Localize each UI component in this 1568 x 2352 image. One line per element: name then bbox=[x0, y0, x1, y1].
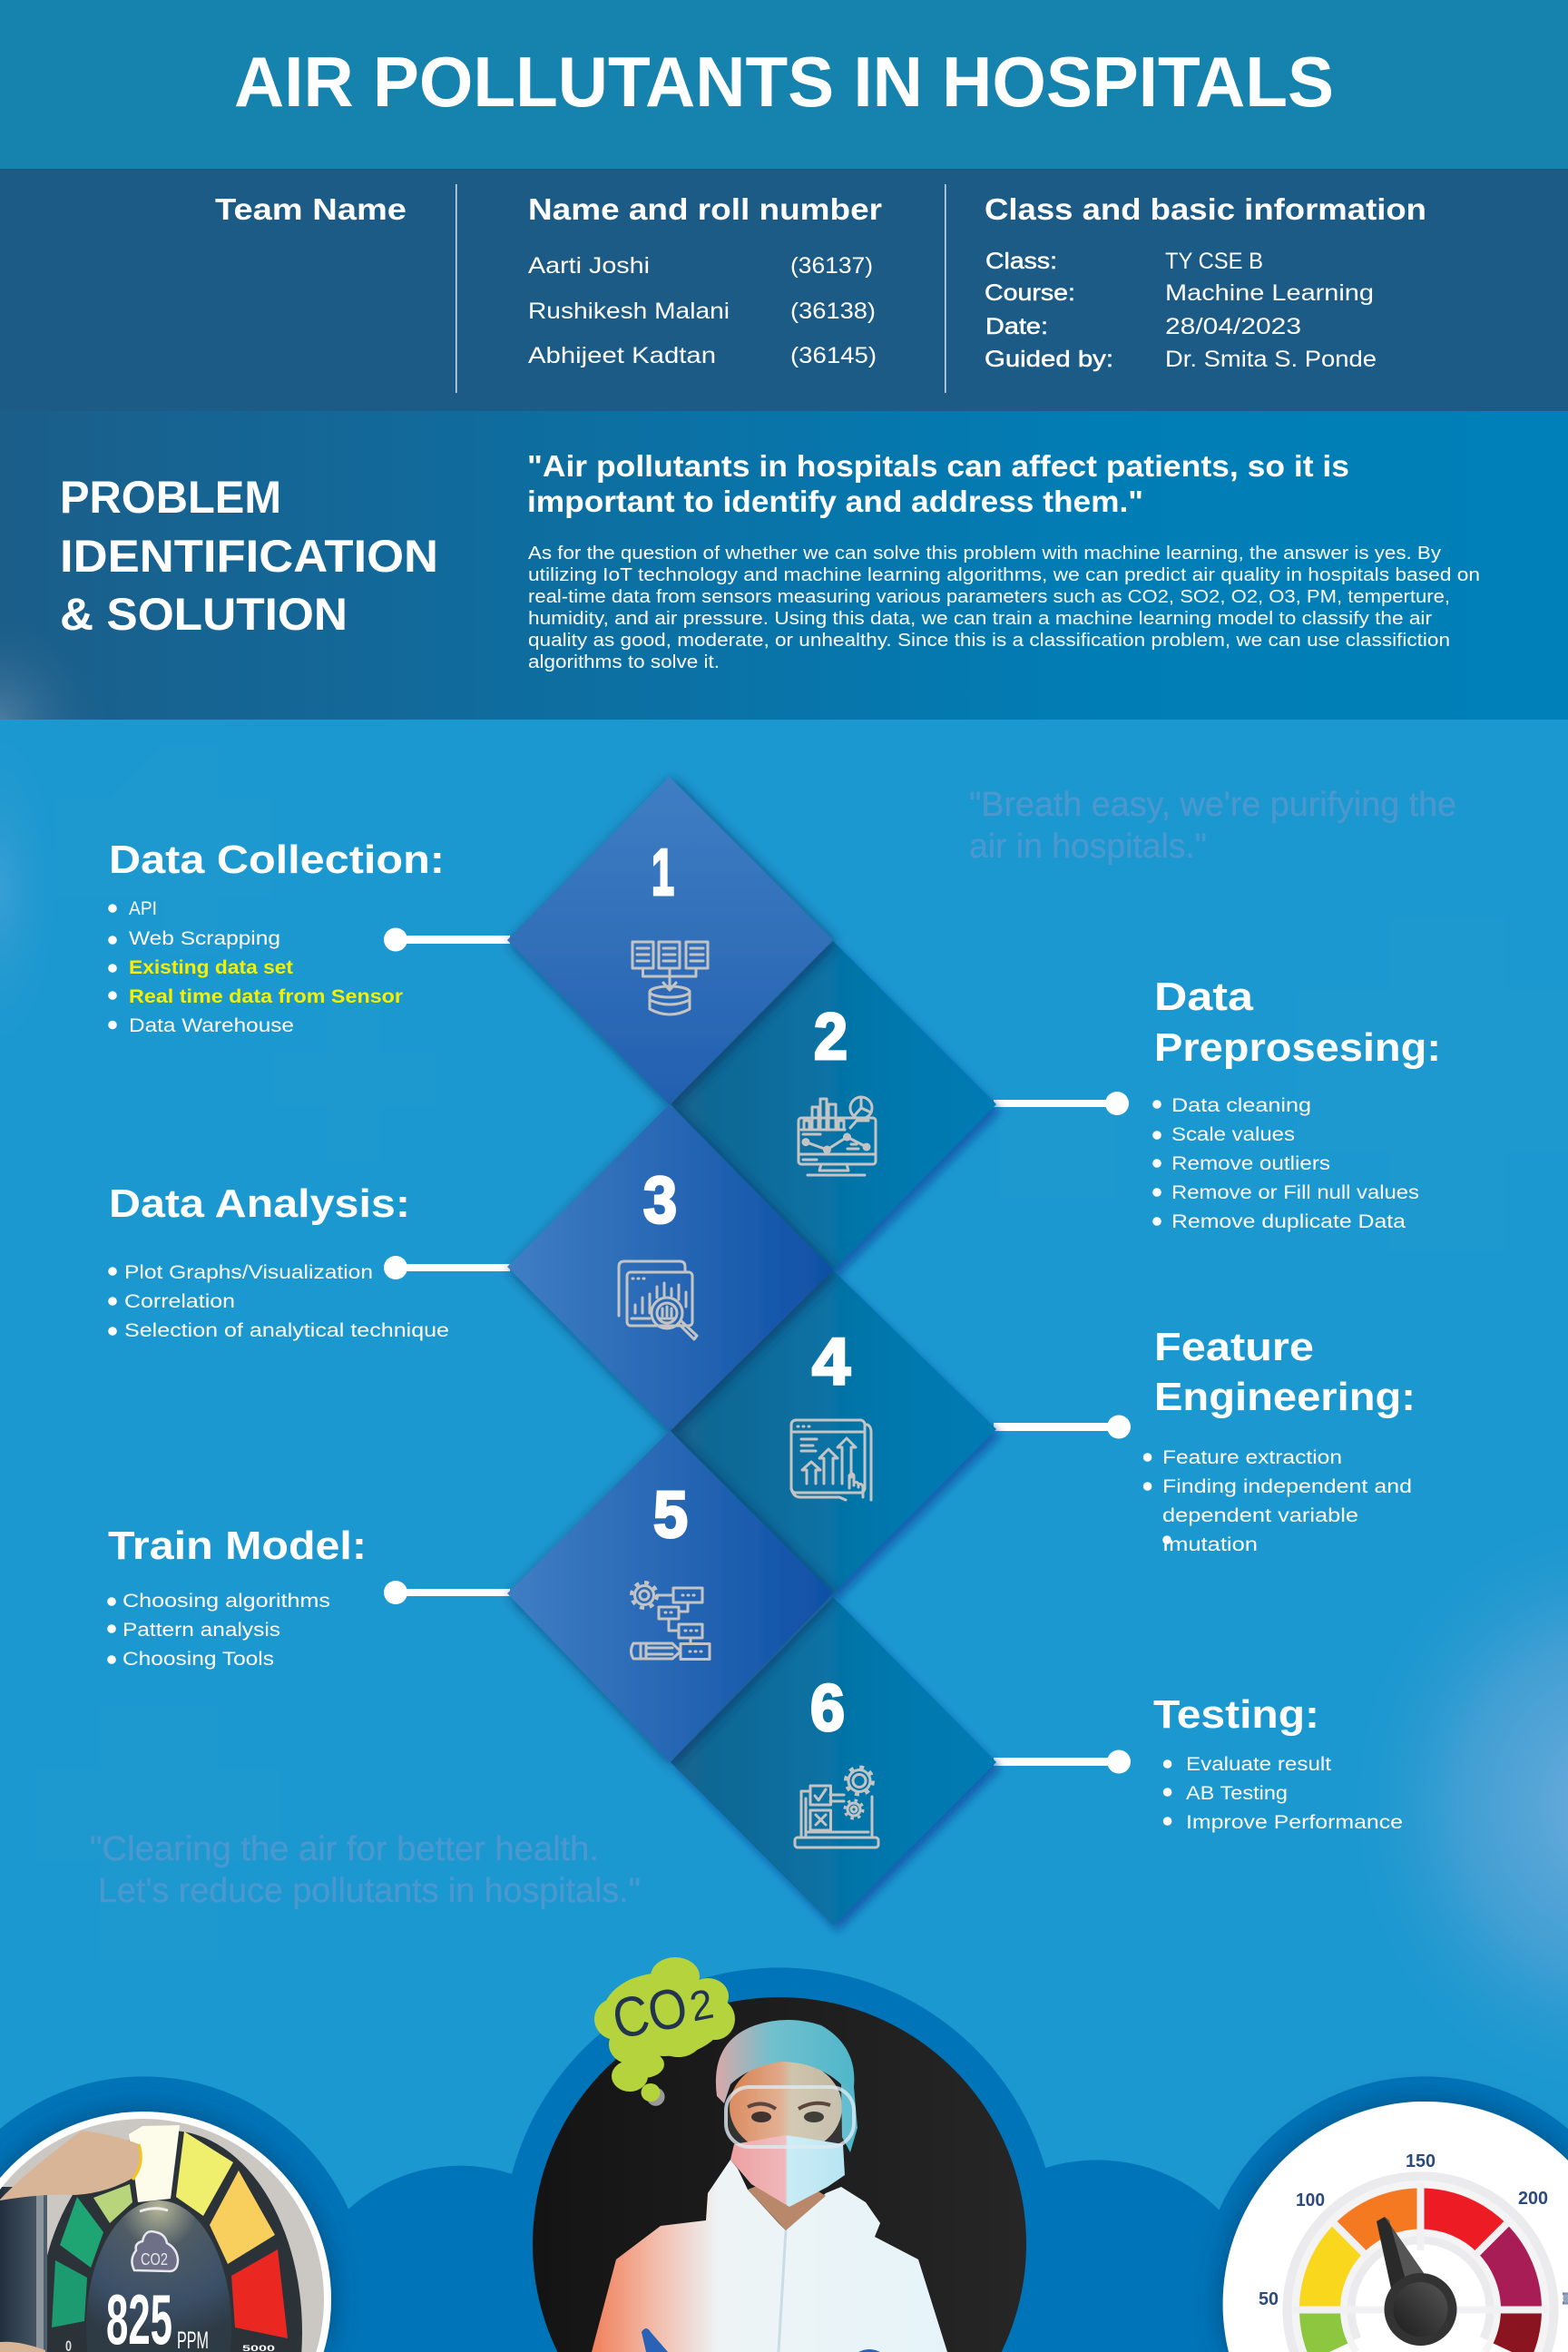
text block: feature engineering bbox=[1143, 1325, 1416, 1555]
text block: train model: Choosing algorithms bbox=[122, 1591, 330, 1612]
CO2 label: 2 bbox=[686, 1980, 717, 2030]
gauge numbers: 200 bbox=[1518, 2189, 1548, 2209]
background cross pattern bbox=[36, 744, 1568, 1960]
names and roll numbers: Aarti Joshi bbox=[528, 253, 650, 279]
text block: feature engineering: Feature bbox=[1154, 1325, 1314, 1369]
gauge numbers: 50 bbox=[1259, 2289, 1279, 2309]
solution paragraph bbox=[528, 544, 1480, 672]
quote bbox=[527, 449, 1349, 518]
names and roll numbers: (36145) bbox=[790, 343, 877, 368]
quote: important to identify and address them." bbox=[527, 485, 1143, 518]
faint quote bottom left: Let's reduce pollutants in hospitals." bbox=[98, 1872, 641, 1910]
suit zipper bbox=[779, 2230, 786, 2352]
text block: testing bbox=[1153, 1692, 1403, 1833]
problem heading: & SOLUTION bbox=[60, 589, 348, 640]
icon: CO2 cloud: CO2 bbox=[141, 2250, 168, 2269]
hair net bbox=[716, 2020, 858, 2152]
class and basic information: TY CSE B bbox=[1165, 249, 1263, 274]
problem heading bbox=[60, 472, 438, 640]
text block: data preprocessing bbox=[1152, 975, 1441, 1232]
icon: analytics monitor bbox=[799, 1097, 876, 1175]
step 6 diamond bbox=[671, 1597, 996, 1926]
gauge segments bbox=[1319, 2209, 1521, 2352]
title: AIR POLLUTANTS IN HOSPITALS bbox=[234, 42, 1334, 122]
faint quote top right: air in hospitals." bbox=[969, 828, 1207, 866]
problem heading: IDENTIFICATION bbox=[60, 531, 438, 582]
text block: data collection: Existing data set bbox=[129, 957, 293, 978]
class and basic information: Course: bbox=[985, 280, 1075, 306]
text block: feature engineering: dependent variable bbox=[1162, 1505, 1358, 1526]
text block: data analysis: Selection of analytical technique bbox=[124, 1320, 449, 1341]
text block: data analysis bbox=[108, 1181, 449, 1341]
panel: team information bbox=[0, 169, 1568, 411]
icon: magnifier over chart bbox=[619, 1261, 697, 1339]
text block: data collection: Web Scrapping bbox=[129, 928, 280, 949]
text block: data preprocessing: Remove or Fill null values bbox=[1171, 1182, 1419, 1203]
solution paragraph: utilizing IoT technology and machine learning algorithms, we can predict air quality in hospitals based on bbox=[528, 565, 1480, 585]
surgical mask bbox=[730, 2135, 845, 2207]
text block: testing: Improve Performance bbox=[1186, 1812, 1403, 1833]
team name heading: Team Name bbox=[215, 192, 407, 226]
eyes and brows bbox=[748, 2103, 830, 2122]
text block: data collection: Data Collection: bbox=[109, 838, 445, 882]
blue gloves bbox=[642, 2328, 880, 2352]
solution paragraph: quality as good, moderate, or unhealthy. Since this is a classification problem, we can use classifiction bbox=[528, 631, 1450, 651]
text block: train model: Choosing Tools bbox=[122, 1649, 274, 1670]
text block: data preprocessing: Remove duplicate Data bbox=[1171, 1211, 1406, 1232]
goggles bbox=[726, 2087, 854, 2147]
background glow left bbox=[0, 720, 64, 1062]
solution paragraph: real-time data from sensors measuring various parameters such as CO2, SO2, O2, O3, PM, temperture, bbox=[528, 587, 1450, 607]
names and roll numbers: Name and roll number bbox=[528, 192, 882, 226]
text block: train model bbox=[107, 1524, 367, 1670]
text block: data preprocessing: Scale values bbox=[1171, 1124, 1295, 1145]
quote: "Air pollutants in hospitals can affect patients, so it is bbox=[527, 449, 1349, 483]
person photo circle bbox=[533, 1997, 1026, 2352]
solution paragraph: As for the question of whether we can solve this problem with machine learning, the answer is yes. By bbox=[528, 544, 1441, 564]
step number 6: 6 bbox=[810, 1672, 845, 1745]
step number 4: 4 bbox=[812, 1326, 850, 1398]
text block: feature engineering: Imutation bbox=[1162, 1534, 1258, 1555]
text block: train model: Pattern analysis bbox=[122, 1620, 280, 1641]
protective suit bbox=[592, 2160, 947, 2352]
text block: train model: Train Model: bbox=[108, 1524, 367, 1568]
names and roll numbers: (36137) bbox=[790, 253, 873, 279]
class and basic information: Class and basic information bbox=[985, 192, 1426, 226]
step number 1: 1 bbox=[652, 837, 674, 909]
text block: data collection: Data Warehouse bbox=[129, 1015, 294, 1036]
class and basic information: 28/04/2023 bbox=[1165, 314, 1301, 339]
gauge track bbox=[1319, 2208, 1523, 2352]
faint quote bottom left: "Clearing the air for better health. bbox=[90, 1830, 599, 1868]
faint quote bottom left bbox=[90, 1830, 641, 1910]
names and roll numbers bbox=[528, 192, 882, 368]
text block: data analysis: Correlation bbox=[124, 1291, 235, 1312]
step number 5: 5 bbox=[653, 1479, 688, 1552]
CO2 label: CO bbox=[608, 1975, 692, 2052]
icon: data sources to database bbox=[632, 942, 708, 1014]
class and basic information: Dr. Smita S. Ponde bbox=[1165, 347, 1377, 372]
text block: feature engineering: Finding independent and bbox=[1162, 1476, 1412, 1497]
faint quote top right: "Breath easy, we're purifying the bbox=[969, 786, 1456, 824]
problem heading: PROBLEM bbox=[60, 472, 281, 523]
icon: CO2 cloud bbox=[132, 2231, 178, 2271]
CO2 thought bubble bbox=[594, 1957, 735, 2106]
text block: data analysis: Data Analysis: bbox=[109, 1181, 410, 1226]
step 5 diamond bbox=[507, 1431, 833, 1762]
names and roll numbers: Rushikesh Malani bbox=[528, 299, 730, 324]
step 4 diamond bbox=[671, 1270, 996, 1593]
text block: data collection: Real time data from Sensor bbox=[129, 986, 403, 1007]
text block: testing: Testing: bbox=[1153, 1692, 1319, 1737]
CO2 meter photo bbox=[0, 2105, 345, 2352]
solution paragraph: algorithms to solve it. bbox=[528, 652, 720, 672]
neck bbox=[748, 2173, 826, 2230]
text block: data preprocessing: Data bbox=[1154, 975, 1254, 1019]
text block: data collection: API bbox=[129, 898, 157, 919]
gauge numbers: 100 bbox=[1296, 2190, 1325, 2210]
icon: gear and workflow bbox=[632, 1583, 710, 1659]
connectors bbox=[384, 927, 1131, 1773]
class and basic information: Guided by: bbox=[985, 347, 1113, 372]
text block: data collection bbox=[108, 838, 445, 1036]
text block: testing: Evaluate result bbox=[1186, 1754, 1331, 1775]
class and basic information bbox=[985, 192, 1426, 372]
class and basic information: Date: bbox=[985, 314, 1048, 339]
text block: data analysis: Plot Graphs/Visualization bbox=[124, 1262, 373, 1283]
icon: testing laptop and gears bbox=[795, 1768, 878, 1847]
blue cloud backdrop bbox=[0, 1967, 1568, 2352]
step 1 diamond bbox=[507, 777, 833, 1104]
panel: problem identification and solution bbox=[0, 411, 1568, 720]
step 3 diamond bbox=[507, 1104, 833, 1431]
names and roll numbers: (36138) bbox=[790, 299, 876, 324]
step number 2: 2 bbox=[814, 1001, 848, 1073]
icon: growth chart window bbox=[791, 1420, 871, 1500]
text block: data preprocessing: Preprosesing: bbox=[1154, 1025, 1441, 1070]
gauge numbers: 150 bbox=[1406, 2151, 1436, 2171]
text block: feature engineering: Engineering: bbox=[1154, 1375, 1416, 1419]
solution paragraph: humidity, and air pressure. Using this data, we can train a machine learning model to classify the air bbox=[528, 609, 1432, 629]
faint quote top right bbox=[969, 786, 1456, 866]
background glow right bbox=[1343, 1506, 1568, 2105]
text block: data preprocessing: Data cleaning bbox=[1171, 1095, 1311, 1116]
face bbox=[730, 2060, 842, 2154]
step 2 diamond bbox=[671, 941, 996, 1270]
text block: data preprocessing: Remove outliers bbox=[1171, 1153, 1330, 1174]
gauge segments bbox=[52, 2125, 288, 2338]
names and roll numbers: Abhijeet Kadtan bbox=[528, 343, 716, 368]
text block: testing: AB Testing bbox=[1186, 1783, 1288, 1804]
speedometer gauge bbox=[1223, 2102, 1568, 2352]
header band bbox=[0, 0, 1568, 169]
text block: feature engineering: Feature extraction bbox=[1162, 1447, 1342, 1468]
step number 3: 3 bbox=[643, 1164, 677, 1237]
class and basic information: Class: bbox=[985, 249, 1057, 274]
gauge numbers bbox=[1259, 2151, 1568, 2309]
class and basic information: Machine Learning bbox=[1165, 280, 1374, 306]
finger bbox=[0, 2131, 141, 2200]
gauge needle bbox=[1377, 2217, 1457, 2346]
